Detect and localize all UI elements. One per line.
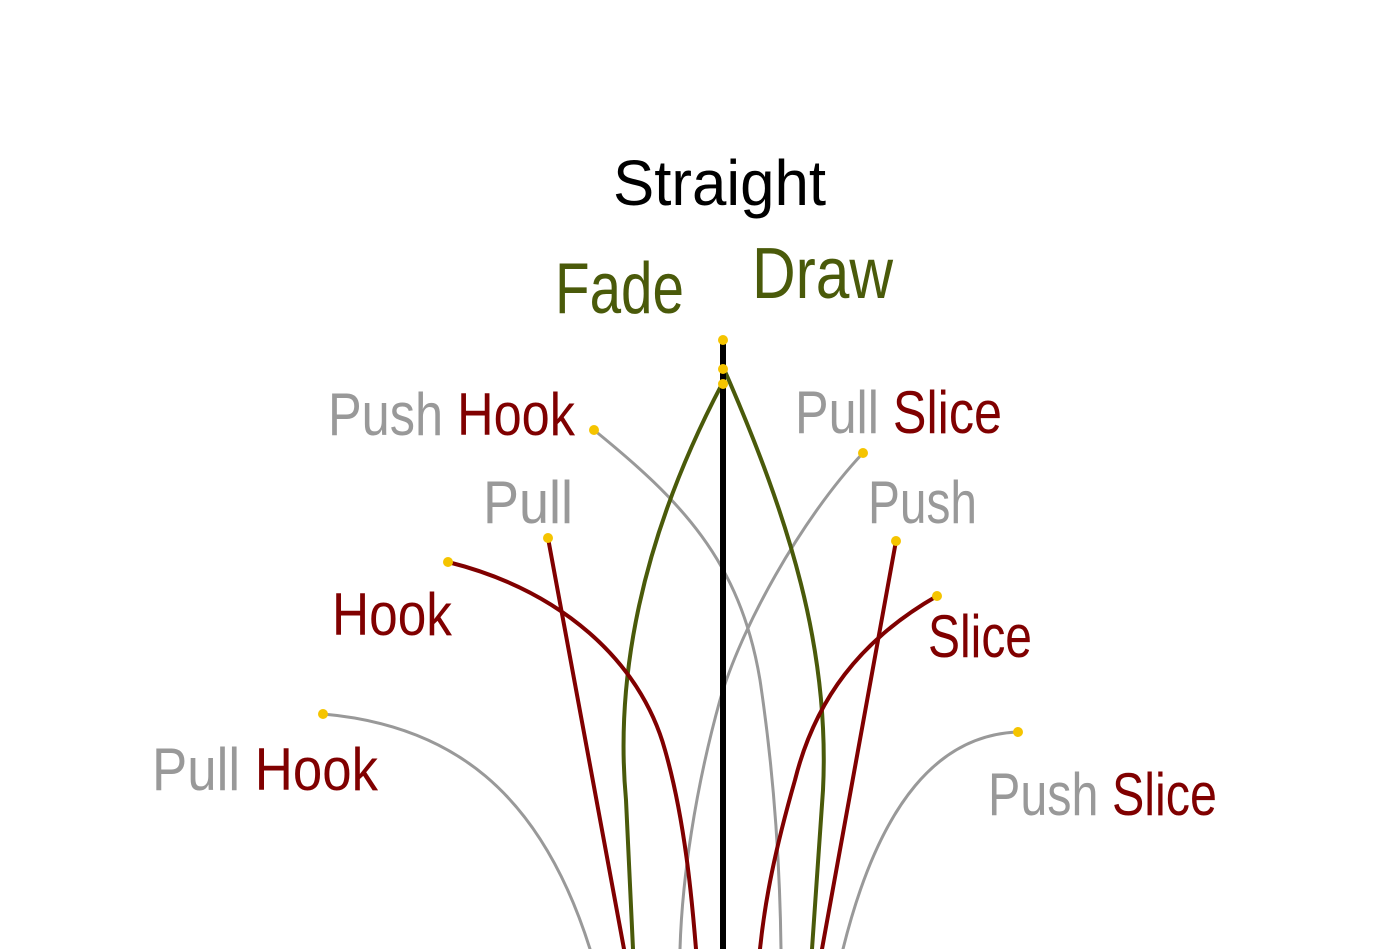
shot paths	[323, 340, 1018, 949]
path: pull	[548, 538, 624, 949]
label: pull: Pull	[483, 469, 573, 536]
path: push	[822, 541, 896, 949]
label: fade: Fade	[555, 249, 684, 329]
path: fade	[624, 384, 722, 949]
label: pull slice: Pull Slice	[795, 379, 1002, 446]
label: push slice: Push Slice	[988, 761, 1217, 828]
path: pull slice	[680, 453, 863, 949]
label: slice: Slice	[928, 603, 1032, 670]
path: hook	[448, 562, 696, 949]
path: slice	[760, 596, 937, 949]
label: hook: Hook	[332, 581, 453, 648]
path: straight	[720, 340, 726, 949]
path: draw	[724, 369, 824, 949]
path: push slice	[843, 732, 1018, 949]
path: pull hook	[323, 714, 590, 949]
start dots	[318, 335, 1023, 737]
label: pull hook: Pull Hook	[152, 736, 379, 803]
label: push: Push	[868, 469, 977, 536]
path: push hook	[594, 430, 781, 949]
label: straight: Straight	[613, 147, 826, 219]
label: push hook: Push Hook	[328, 381, 576, 448]
label: draw: Draw	[752, 234, 894, 314]
